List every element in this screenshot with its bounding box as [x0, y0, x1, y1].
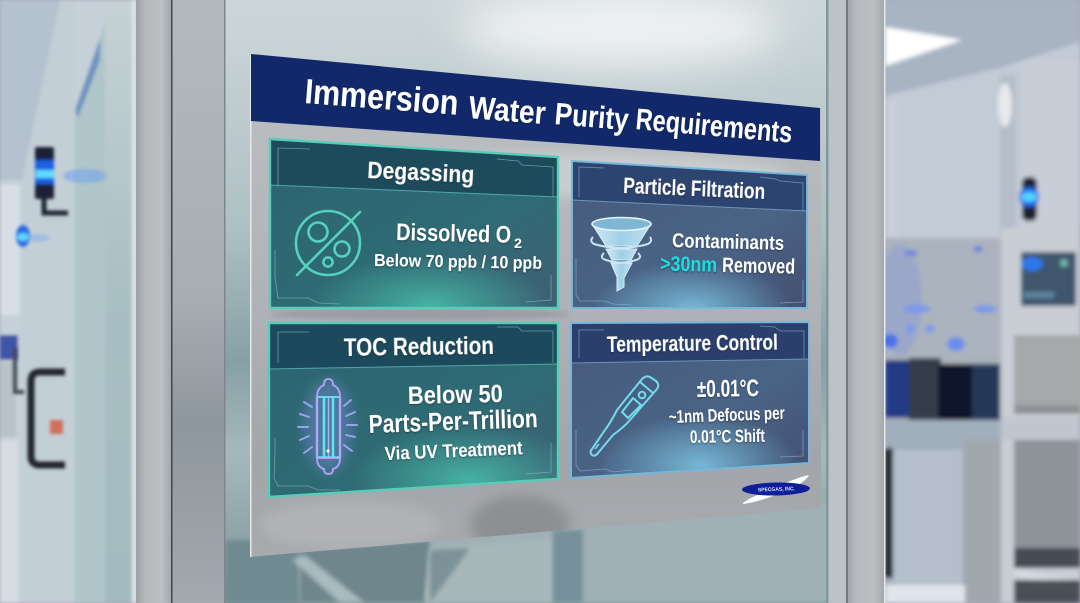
panel: TOC reduction: [268, 322, 560, 498]
text: temperature tolerance: ~1nm Defocus per: [668, 403, 785, 427]
steel door frame left: [136, 0, 226, 603]
heading: temperature control: Temperature Control: [607, 330, 778, 357]
text: temperature tolerance: [668, 375, 785, 447]
panel: degassing: [268, 138, 560, 310]
glass panel behind sign: [225, 0, 828, 603]
text: temperature tolerance: ±0.01°C: [697, 375, 759, 403]
panel: temperature control: [570, 321, 810, 480]
text: below 50 ppt: Parts-Per-Trillion: [368, 403, 538, 439]
text: below 50 ppt: [368, 380, 538, 465]
left corridor: [0, 0, 140, 603]
text: contaminants removed: Removed: [722, 254, 795, 279]
icon: bubbles crossed out: [296, 211, 360, 275]
right room: [878, 0, 1080, 603]
logo: Specgas Inc.: SPECGAS, INC.: [758, 486, 796, 493]
icon: right blue status light: [1019, 177, 1039, 221]
heading: degassing: Degassing: [367, 157, 475, 189]
circuit corners: [576, 167, 803, 305]
icon: left blue status lights and door handle: [15, 147, 107, 465]
steel door frame right: [826, 0, 886, 603]
title text: Requirements: [634, 103, 794, 150]
text: contaminants removed: Contaminants: [672, 230, 784, 255]
title text: [303, 72, 794, 150]
panel: stainless sign plate: [250, 54, 821, 557]
text: contaminants removed: >30nm: [660, 253, 717, 277]
reflections on glass: [225, 0, 840, 603]
text: dissolved oxygen: 2: [514, 235, 522, 251]
title text: Water: [467, 89, 547, 131]
circuit corners: [275, 148, 553, 304]
heading: particle filtration: Particle Filtration: [623, 173, 766, 204]
panel: particle filtration: [571, 160, 808, 309]
text: dissolved oxygen: [374, 219, 542, 273]
title banner: [251, 54, 820, 161]
logo: Specgas Inc.: [742, 475, 810, 504]
icon: thermometer: [590, 376, 658, 456]
title text: Purity: [553, 96, 631, 137]
circuit corners: [274, 327, 553, 490]
text: contaminants removed: [660, 230, 795, 279]
title text: Immersion: [303, 72, 460, 123]
circuit corners: [576, 326, 804, 472]
icon: UV lamp: [298, 379, 357, 474]
text: below 50 ppt: Via UV Treatment: [384, 438, 524, 465]
heading: TOC reduction: TOC Reduction: [344, 332, 494, 362]
text: temperature tolerance: 0.01°C Shift: [690, 426, 765, 447]
text: dissolved oxygen: Below 70 ppb / 10 ppb: [374, 250, 542, 273]
icon: filtration funnel: [591, 218, 651, 291]
text: dissolved oxygen: Dissolved O: [396, 219, 511, 249]
text: below 50 ppt: Below 50: [408, 380, 503, 410]
